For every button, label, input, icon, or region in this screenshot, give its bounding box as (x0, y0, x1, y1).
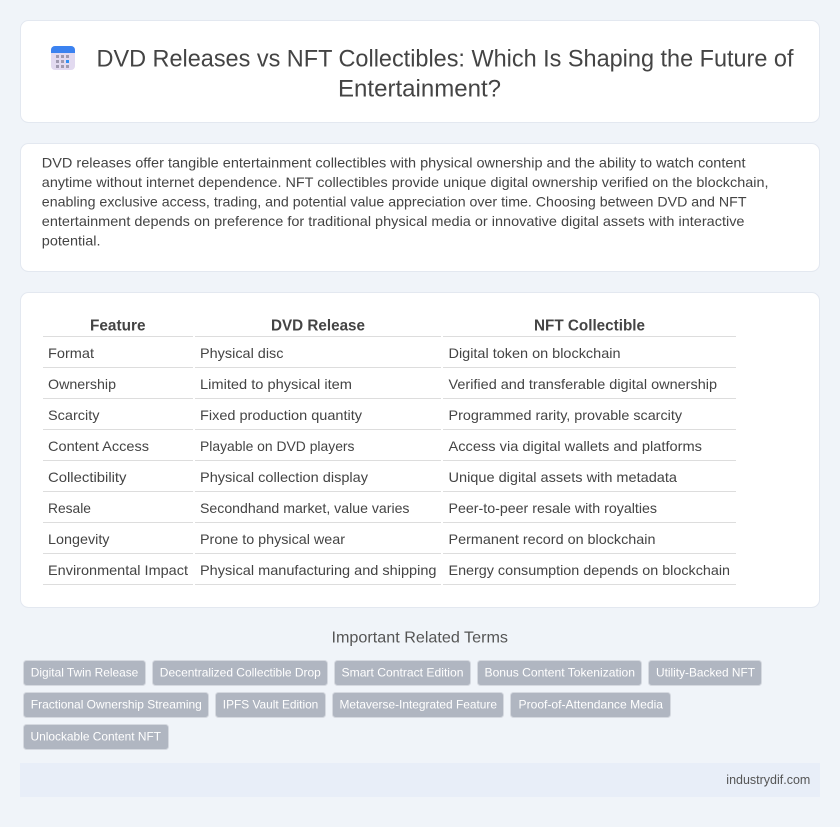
tag: Decentralized Collectible Drop (160, 666, 321, 680)
text block: intro: anytime without internet dependence. NFT collectibles provide unique digital ownership verified on the blockchain, (42, 174, 769, 190)
row: Scarcity: Fixed production quantity (200, 407, 362, 423)
icon: calendar grid (51, 46, 75, 70)
row: Longevity: Prone to physical wear (200, 531, 345, 547)
tag (24, 692, 208, 718)
row: Ownership: Limited to physical item (200, 376, 352, 392)
tag (478, 660, 642, 686)
heading: related terms: Important Related Terms (332, 630, 508, 646)
title: DVD Releases vs NFT Collectibles: Which Is Shaping the Future of (96, 46, 794, 72)
table header row: DVD Release (271, 318, 365, 334)
tag (24, 724, 168, 750)
tag: Fractional Ownership Streaming (31, 698, 202, 712)
title: Entertainment? (338, 76, 501, 102)
tag (510, 692, 670, 718)
text block: intro: entertainment depends on preference for traditional physical media or innovative digital assets with interactive (42, 213, 745, 229)
row: Ownership: Verified and transferable digital ownership (448, 376, 717, 392)
text block: intro (42, 154, 769, 248)
row: Ownership (43, 376, 736, 399)
row: Content Access: Playable on DVD players (200, 438, 354, 454)
tag: Utility-Backed NFT (656, 666, 756, 680)
row: Scarcity: Scarcity (48, 407, 100, 423)
row: Content Access (43, 438, 736, 461)
panel: title card (20, 20, 820, 122)
tag: Unlockable Content NFT (30, 730, 162, 744)
row: Collectibility (43, 469, 736, 492)
row: Content Access: Access via digital wallets and platforms (448, 438, 702, 454)
row: Resale: Peer-to-peer resale with royalties (448, 500, 657, 516)
table header row: NFT Collectible (534, 318, 645, 334)
tag: Proof-of-Attendance Media (518, 698, 663, 712)
tag (332, 692, 504, 718)
tag (648, 660, 762, 686)
row: Longevity (43, 531, 736, 554)
row: Format: Digital token on blockchain (448, 345, 620, 361)
row: Scarcity (43, 407, 736, 430)
row: Resale: Resale (48, 500, 91, 516)
tag (24, 660, 146, 686)
row: Content Access: Content Access (48, 438, 149, 454)
table header row: Feature (90, 318, 146, 334)
tag (216, 692, 326, 718)
text block: intro: potential. (42, 232, 100, 248)
row: Environmental Impact: Environmental Impact (48, 562, 188, 578)
panel: comparison table card (20, 292, 820, 608)
tag: IPFS Vault Edition (223, 698, 318, 712)
row: Ownership: Ownership (48, 376, 116, 392)
row: Scarcity: Programmed rarity, provable scarcity (448, 407, 682, 423)
row: Resale (43, 500, 736, 523)
row: Environmental Impact (43, 562, 736, 585)
row: Collectibility: Physical collection display (200, 469, 368, 485)
text block: intro: DVD releases offer tangible entertainment collectibles with physical ownership and the ability to watch content (42, 154, 746, 170)
tag: Bonus Content Tokenization (484, 666, 635, 680)
row: Format (43, 345, 736, 368)
row: Environmental Impact: Physical manufacturing and shipping (200, 562, 436, 578)
tag (152, 660, 328, 686)
row: Longevity: Permanent record on blockchain (448, 531, 656, 547)
tag: Metaverse-Integrated Feature (340, 698, 497, 712)
table header row (43, 318, 736, 337)
panel: intro text card (20, 144, 820, 272)
row: Collectibility: Collectibility (48, 469, 126, 485)
row: Environmental Impact: Energy consumption depends on blockchain (448, 562, 730, 578)
row: Longevity: Longevity (48, 531, 110, 547)
tag: Digital Twin Release (31, 666, 139, 680)
row: Resale: Secondhand market, value varies (200, 500, 410, 516)
footer bar (20, 763, 820, 797)
tag list (24, 660, 762, 750)
text block: intro: enabling exclusive access, trading, and potential value appreciation over time. Choosing between DVD and NFT (42, 194, 747, 210)
footer credit: industrydif.com (726, 773, 810, 787)
title (96, 46, 794, 102)
row: Collectibility: Unique digital assets with metadata (448, 469, 677, 485)
tag (334, 660, 470, 686)
tag: Smart Contract Edition (342, 666, 464, 680)
row: Format: Format (48, 345, 94, 361)
row: Format: Physical disc (200, 345, 284, 361)
